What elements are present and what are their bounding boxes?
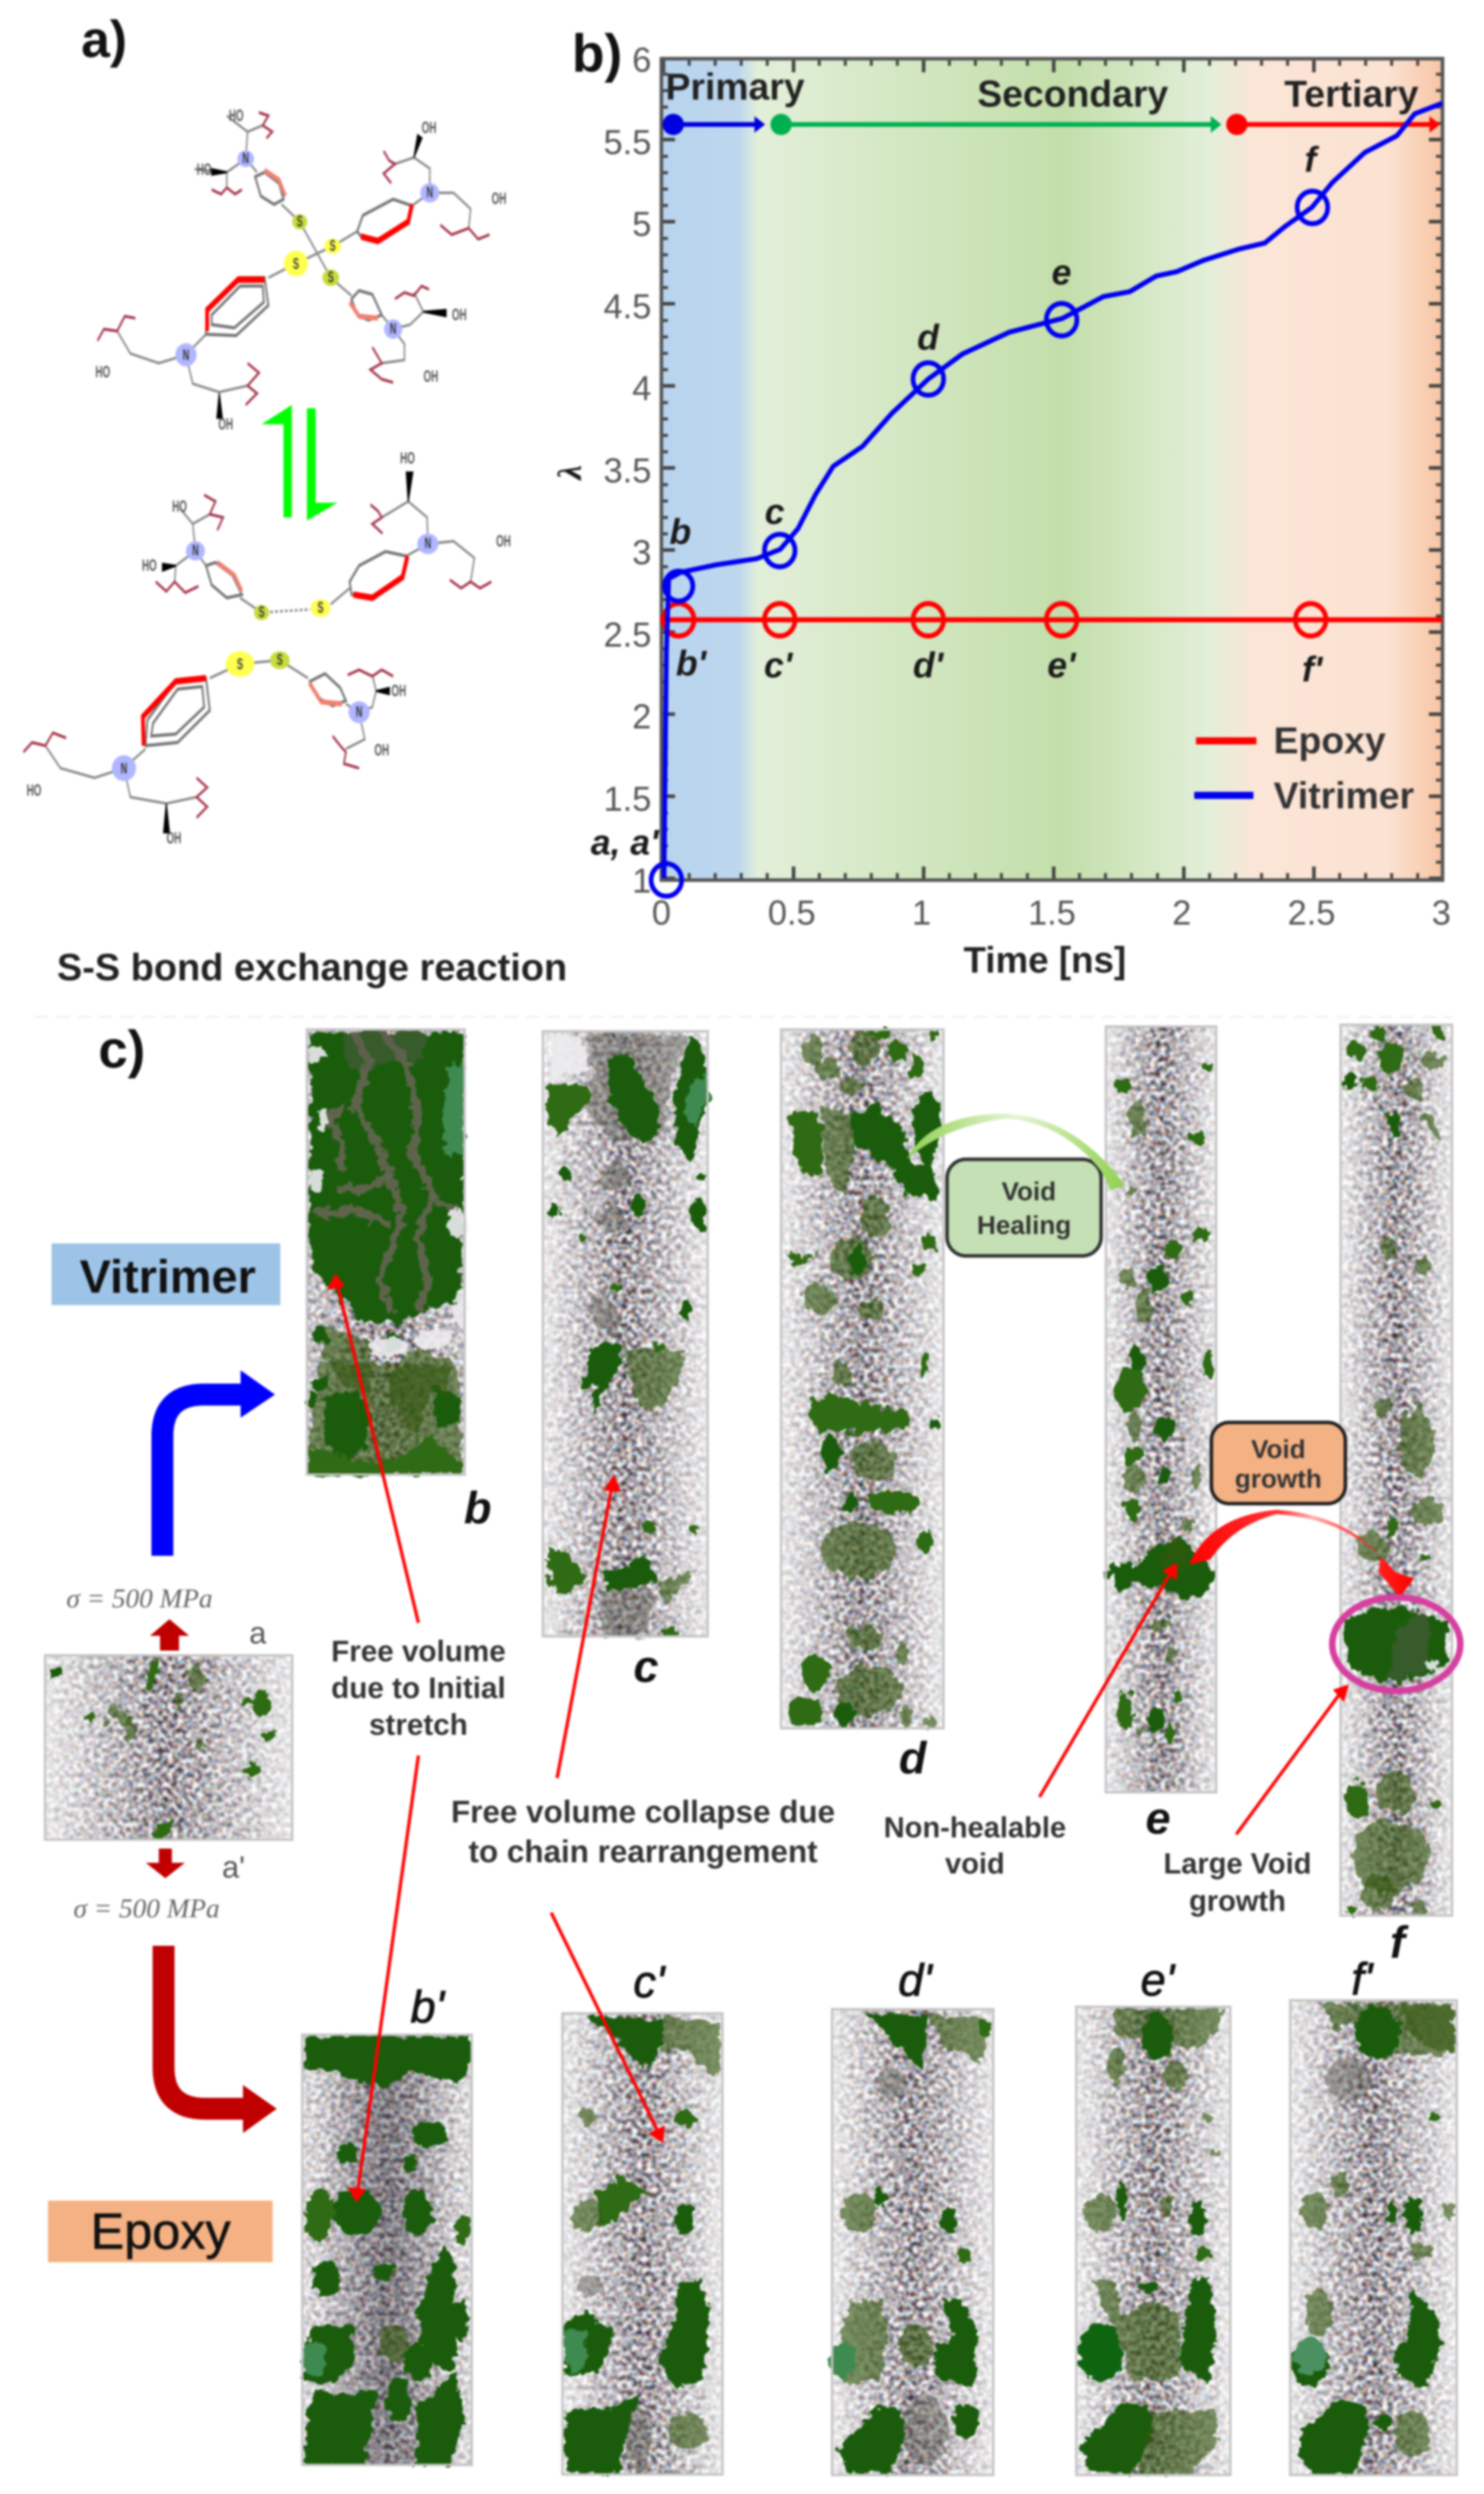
panel: epoxy c prime [562,2013,722,2474]
panel label: d prime: d' [898,1955,933,2006]
point labels: c [765,492,785,532]
molecule: separated bottom pair: N [424,535,431,552]
molecule: separated bottom pair: OH [167,828,181,847]
point labels: f' [1302,650,1323,689]
stage labels: Primary [666,66,805,108]
panel label: f prime: f' [1351,1954,1374,2004]
y axis tick labels: 3.5 [603,452,651,490]
label: stress above: σ = 500 MPa [66,1583,213,1613]
panel a: molecular structures [24,105,511,847]
arrow: blue elbow to vitrimer [162,1370,275,1556]
molecule: top pair: HO [95,362,110,381]
point labels: d [917,318,940,357]
x axis tick labels: 2 [1172,894,1191,932]
annotation: free volume due to initial stretch: due to Initial [331,1671,506,1705]
x axis title: Time [ns] [964,940,1126,981]
label: Vitrimer [52,1243,280,1305]
icon: small red down arrow [146,1849,185,1878]
panel: vitrimer f [1341,1025,1452,1916]
molecule: top pair: N [183,346,189,363]
molecule: top pair: N [427,184,433,201]
y axis tick labels: 1 [632,862,651,900]
arrow: collapse to panel c [557,1475,621,1778]
stage labels [666,66,1418,115]
panel label c: c) [98,1019,145,1079]
x axis tick labels: 2.5 [1288,894,1335,932]
point labels [591,140,1323,862]
molecule: separated bottom pair: N [356,703,362,720]
vitrimer curve with markers [651,103,1443,896]
point labels: b [670,512,691,552]
legend: Epoxy [1274,720,1386,762]
panel label: d: d [899,1733,928,1783]
label: stress below: σ = 500 MPa [73,1893,220,1923]
epoxy curve with markers [660,603,1443,636]
panel: vitrimer b [306,1029,467,1475]
label: Vitrimer: Vitrimer [79,1250,256,1303]
arrow: collapse to panel c prime [551,1913,665,2143]
callout: Void Healing: Healing [977,1211,1071,1240]
x axis tick labels: 0.5 [768,894,815,932]
y axis tick labels: 4.5 [603,287,651,326]
panel: initial structure a [45,1655,292,1840]
panel label b: b) [572,24,622,84]
annotation: non-healable void: void [945,1848,1005,1880]
panel label: b: b [464,1483,491,1533]
callout: Void Healing: Void [1002,1177,1056,1206]
molecule: top pair: HO [197,159,212,178]
arrow: free volume to panel b prime [348,1756,418,2202]
y axis title: λ [552,465,589,481]
panel: epoxy b prime [302,2035,472,2465]
panel label a: a) [81,11,127,68]
panel label: c prime: c' [634,1957,666,2007]
point labels: f [1304,140,1319,180]
panel: epoxy f prime [1290,2000,1457,2475]
y axis tick labels: 6 [632,41,651,79]
molecule: top pair: OH [424,367,439,385]
panel: vitrimer c [543,1031,709,1636]
stage labels: Tertiary [1284,73,1418,115]
label: Epoxy [48,2201,273,2262]
molecule: separated bottom pair: S [277,651,283,669]
point labels: b' [676,644,707,683]
highlight: large void ellipse [1332,1597,1460,1691]
annotation: free volume due to initial stretch: Free volume [331,1635,506,1668]
plot background with creep stages [661,59,1443,880]
callout: Void growth: growth [1235,1465,1322,1494]
panel: epoxy d prime [830,2009,993,2475]
icon: small red up arrow [150,1619,189,1651]
arrow: free volume to panel b [327,1274,418,1623]
label: Epoxy: Epoxy [91,2204,231,2260]
molecule: top pair: S [293,255,299,272]
molecule: top pair: S [328,268,334,286]
point labels: e [1051,252,1072,292]
molecule: top pair: S [330,237,335,254]
molecule: separated bottom pair: S [258,603,264,621]
molecule: top pair: N [242,149,249,167]
point labels: c' [764,645,794,685]
panel label: c: c [634,1642,658,1692]
molecule: separated bottom pair: S [318,599,324,616]
y axis tick labels: 2 [632,698,651,736]
molecule: top pair: N [390,320,396,337]
arrow: red elbow to epoxy [164,1946,277,2133]
y axis tick labels: 1.5 [603,780,651,818]
point labels: e' [1047,645,1077,685]
icon: green equilibrium arrows [261,405,338,521]
arrow: green void healing curve [907,1114,1125,1190]
callout: Void growth: Void [1251,1435,1306,1464]
stage labels: Secondary [977,73,1168,115]
y axis tick labels: 2.5 [603,616,651,654]
x axis tick labels [652,894,1451,932]
legend: Vitrimer [1274,775,1414,817]
panel label: f: f [1390,1917,1409,1968]
axis ticks [661,59,1443,880]
legend [1194,720,1414,817]
label: a prime: a' [222,1850,245,1885]
panel label: e: e [1146,1793,1170,1844]
molecule: separated bottom pair: OH [391,681,406,700]
x axis tick labels: 1.5 [1028,894,1076,932]
molecule: separated bottom pair: S [237,656,243,673]
annotation: large void growth [1163,1848,1312,1917]
x axis tick labels: 0 [652,894,671,932]
annotation: large void growth: growth [1189,1885,1286,1917]
y axis tick labels: 5 [632,205,651,244]
callout: Void Healing [947,1159,1101,1256]
stage arrows [663,114,1440,135]
molecule: separated bottom pair: HO [172,497,187,515]
molecule: top pair: OH [491,188,506,207]
y axis tick labels: 3 [632,533,651,572]
x axis tick labels: 1 [912,894,931,932]
arrow: large void growth [1236,1684,1349,1834]
molecule: top pair: OH [421,118,436,137]
point labels: a, a' [591,823,660,862]
caption: S-S bond exchange reaction: S-S bond exchange reaction [57,946,567,989]
y axis tick labels [603,41,651,900]
annotation: non-healable void [884,1812,1066,1880]
annotation: free volume collapse: Free volume collapse due [451,1795,835,1830]
molecule: top pair: OH [452,305,466,324]
panel: vitrimer e [1106,1027,1216,1792]
panel label: b prime: b' [411,1982,446,2032]
arrow: non-healable void [1040,1563,1177,1797]
annotation: free volume collapse [451,1795,835,1869]
molecule: separated bottom pair: OH [496,531,511,550]
y axis tick labels: 5.5 [603,123,651,162]
annotation: free volume collapse: to chain rearrangement [468,1834,818,1869]
panel: vitrimer d [781,1029,944,1729]
molecule: separated bottom pair: HO [400,448,415,467]
panel b: stretch versus time chart [552,41,1451,981]
molecule: separated bottom pair: N [192,542,199,559]
label: a: a [250,1616,267,1651]
y axis tick labels: 4 [632,369,651,408]
callout: Void growth [1211,1422,1345,1504]
panel: epoxy e prime [1076,2007,1230,2475]
molecule: top pair: S [297,213,303,230]
annotation: free volume due to initial stretch [331,1635,506,1741]
molecule: top pair: OH [218,414,233,433]
plot frame [661,59,1443,880]
point labels: d' [913,645,944,685]
annotation: free volume due to initial stretch: stretch [369,1708,468,1741]
molecule: separated bottom pair: N [121,760,127,777]
x axis tick labels: 3 [1432,894,1451,932]
molecule: top pair [95,105,506,433]
molecule: top pair: HO [229,105,244,124]
molecule: separated bottom pair [24,448,511,847]
molecule: separated bottom pair: HO [27,781,41,800]
arrow: red void growth curve [1189,1510,1414,1597]
annotation: large void growth: Large Void [1163,1848,1312,1880]
molecule: separated bottom pair: OH [375,740,389,759]
panel label: e prime: e' [1141,1955,1176,2006]
molecule: separated bottom pair: HO [142,556,156,574]
annotation: non-healable void: Non-healable [884,1812,1066,1844]
